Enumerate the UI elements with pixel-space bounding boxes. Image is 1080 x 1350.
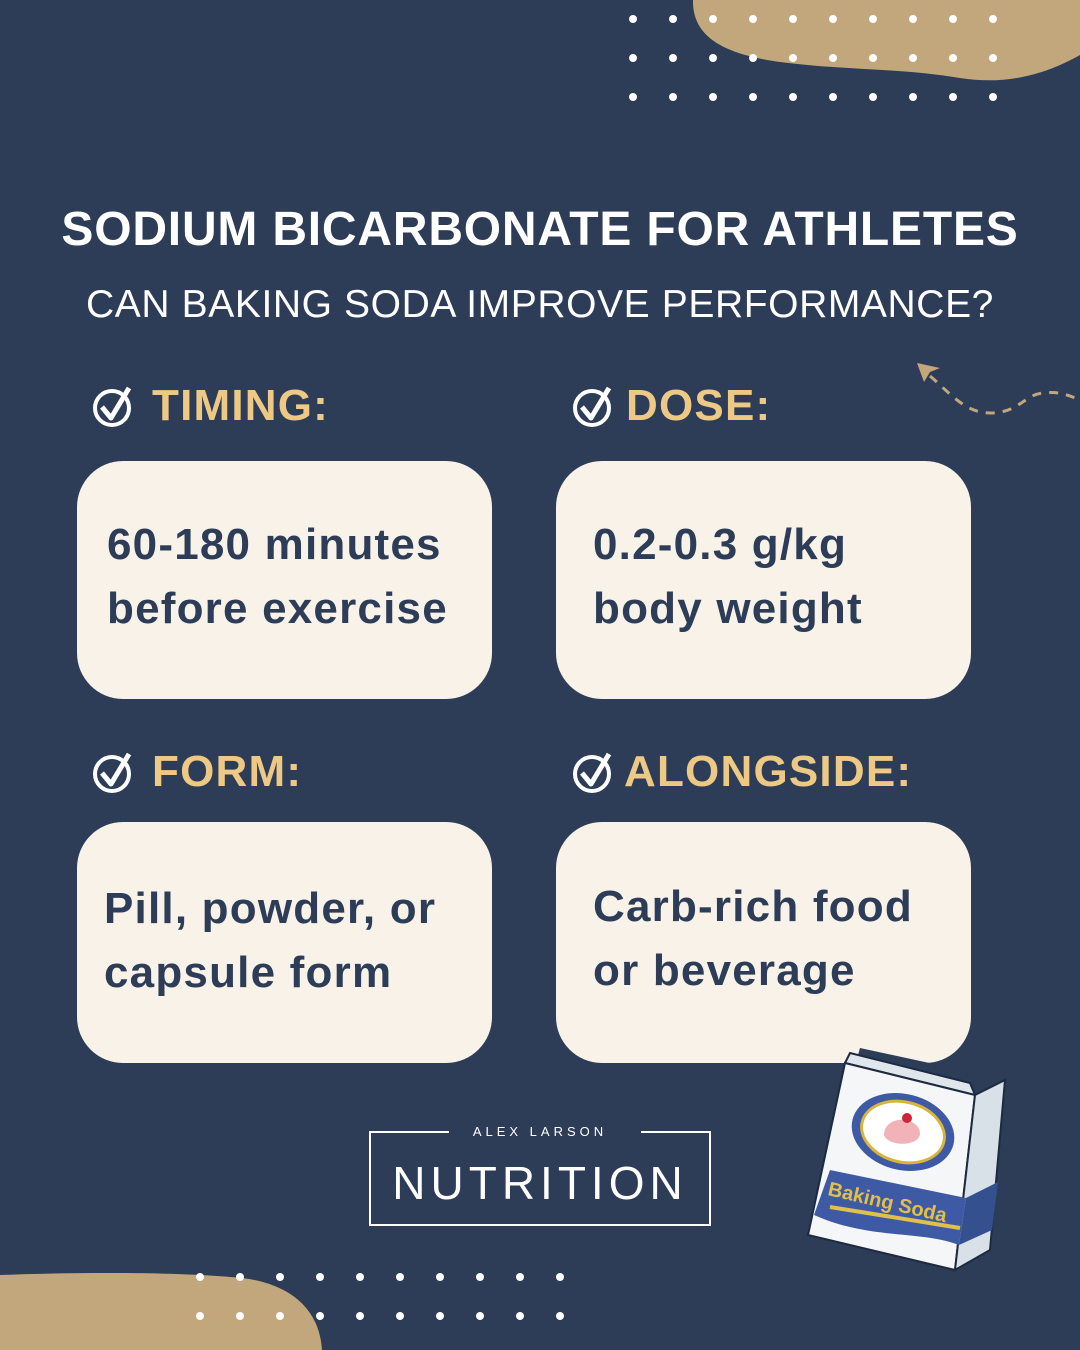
logo — [369, 1124, 711, 1226]
title: SODIUM BICARBONATE FOR ATHLETES — [61, 203, 1019, 256]
card: alongside — [556, 822, 971, 1063]
card: timing: before exercise — [107, 584, 448, 633]
card: dose: 0.2-0.3 g/kg — [593, 520, 847, 569]
card: form: Pill, powder, or — [104, 884, 436, 933]
icon: baking soda box — [807, 1048, 1006, 1272]
card: dose: body weight — [593, 584, 863, 633]
heading: timing: TIMING: — [152, 381, 329, 430]
card: timing — [77, 461, 492, 699]
heading: alongside: ALONGSIDE: — [624, 747, 912, 796]
arrow: dashed curve — [917, 363, 1075, 414]
blob: bottom left — [0, 1273, 322, 1350]
subtitle: CAN BAKING SODA IMPROVE PERFORMANCE? — [86, 283, 994, 326]
card: alongside: Carb-rich food — [593, 882, 913, 931]
logo: NUTRITION — [392, 1157, 688, 1209]
card: alongside: or beverage — [593, 946, 856, 995]
card: form — [77, 822, 492, 1063]
blob: top right — [693, 0, 1080, 80]
card: timing: 60-180 minutes — [107, 520, 442, 569]
icon: baking soda box: Baking Soda — [826, 1178, 950, 1227]
card: form: capsule form — [104, 948, 392, 997]
heading: dose: DOSE: — [626, 381, 771, 430]
logo: ALEX LARSON — [473, 1124, 607, 1139]
heading: form: FORM: — [152, 747, 302, 796]
card: dose — [556, 461, 971, 699]
